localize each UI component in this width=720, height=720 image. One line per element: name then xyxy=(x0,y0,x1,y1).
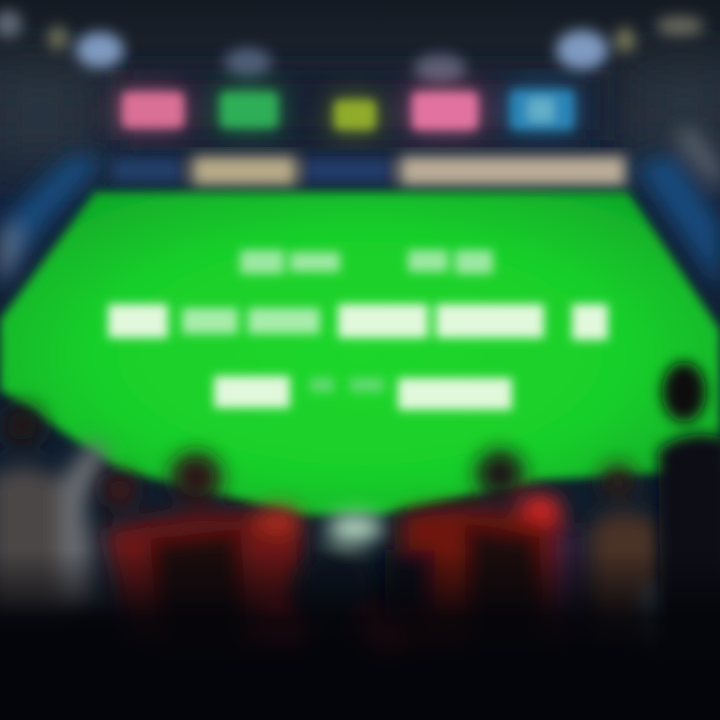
lower banner row xyxy=(112,156,626,186)
center spectators xyxy=(297,514,416,656)
heading line 3 xyxy=(214,376,512,410)
side stands xyxy=(0,128,720,290)
right spectators xyxy=(590,464,667,652)
heading line 1 xyxy=(240,250,493,274)
screen glow xyxy=(118,86,578,132)
field title blocks (illegible blurred text) xyxy=(108,250,608,410)
green field panel xyxy=(0,192,720,515)
red spectators right xyxy=(385,450,585,650)
screens xyxy=(122,90,574,130)
heading line 2 xyxy=(108,304,608,340)
red spectators left xyxy=(102,452,313,660)
ceiling lights xyxy=(0,10,704,82)
left spectator grey xyxy=(0,404,135,620)
crowd silhouettes xyxy=(0,362,720,720)
tall spectator at right xyxy=(658,362,720,660)
crowd base xyxy=(0,600,720,720)
upper screens row xyxy=(118,86,578,132)
foreground fade xyxy=(0,550,720,720)
